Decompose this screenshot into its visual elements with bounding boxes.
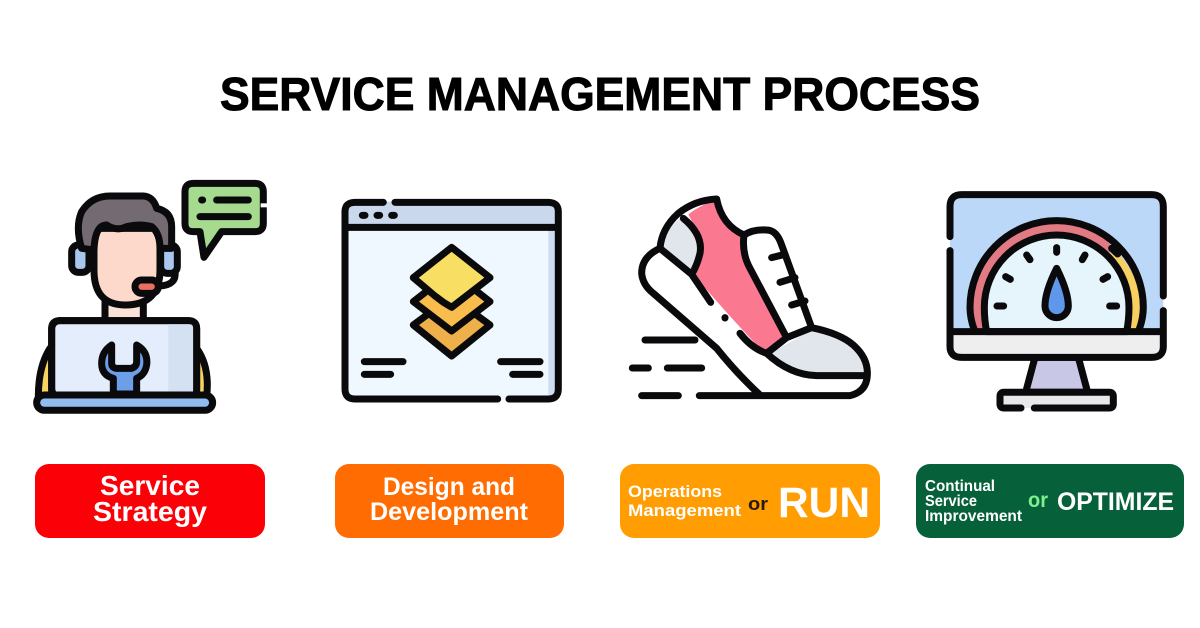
label: service strategy: Service [100,470,200,501]
laces [772,254,805,305]
label: continual service improvement or optimize: OPTIMIZE [1057,488,1174,516]
heel [662,217,699,274]
label: continual service improvement or optimize: Continual [925,478,995,495]
neck [105,298,143,322]
label: operations management or run: or [748,494,768,514]
icon: running shoe [632,199,867,396]
shoulders [38,348,207,397]
gauge [970,221,1143,332]
label: continual service improvement or optimize [916,464,1184,538]
foot [1000,392,1113,408]
label: operations management or run: RUN [778,479,870,527]
icon: wrench [102,345,147,394]
speed lines [632,340,702,368]
tongue [743,230,812,338]
label: operations management or run: Operations [628,482,722,501]
toe [768,330,865,376]
label: design and development: Design and [383,473,515,501]
label: design and development: Development [370,498,529,526]
title: SERVICE MANAGEMENT PROCESS [220,68,980,120]
window dots [362,205,394,226]
laptop [37,321,213,410]
microphone [135,272,175,293]
label: design and development [335,464,564,538]
layers [413,247,490,356]
label: continual service improvement or optimize: or [1028,489,1048,512]
icon: support agent with laptop [37,183,264,410]
face [94,228,160,305]
icon: browser window with layers [345,202,558,400]
label: operations management or run: Management [628,501,741,520]
text lines [364,362,540,374]
window [345,202,558,400]
label: continual service improvement or optimize: Improvement [925,508,1023,525]
label: operations management or run [620,464,880,538]
label: service strategy [35,464,265,538]
label: continual service improvement or optimize: Service [925,493,977,510]
monitor outline [950,195,1163,357]
stand [1026,357,1088,392]
sole [642,249,867,395]
pink upper [688,200,787,353]
ear cups [72,245,89,272]
icon: monitor with gauge [950,195,1163,408]
label: service strategy: Strategy [93,496,208,527]
speech bubble [185,183,264,257]
hair [78,196,172,250]
shoe outlines [642,199,867,396]
screen [950,195,1163,332]
gauge ticks [997,248,1117,306]
gauge needle [1045,268,1068,318]
bezel [950,332,1163,357]
